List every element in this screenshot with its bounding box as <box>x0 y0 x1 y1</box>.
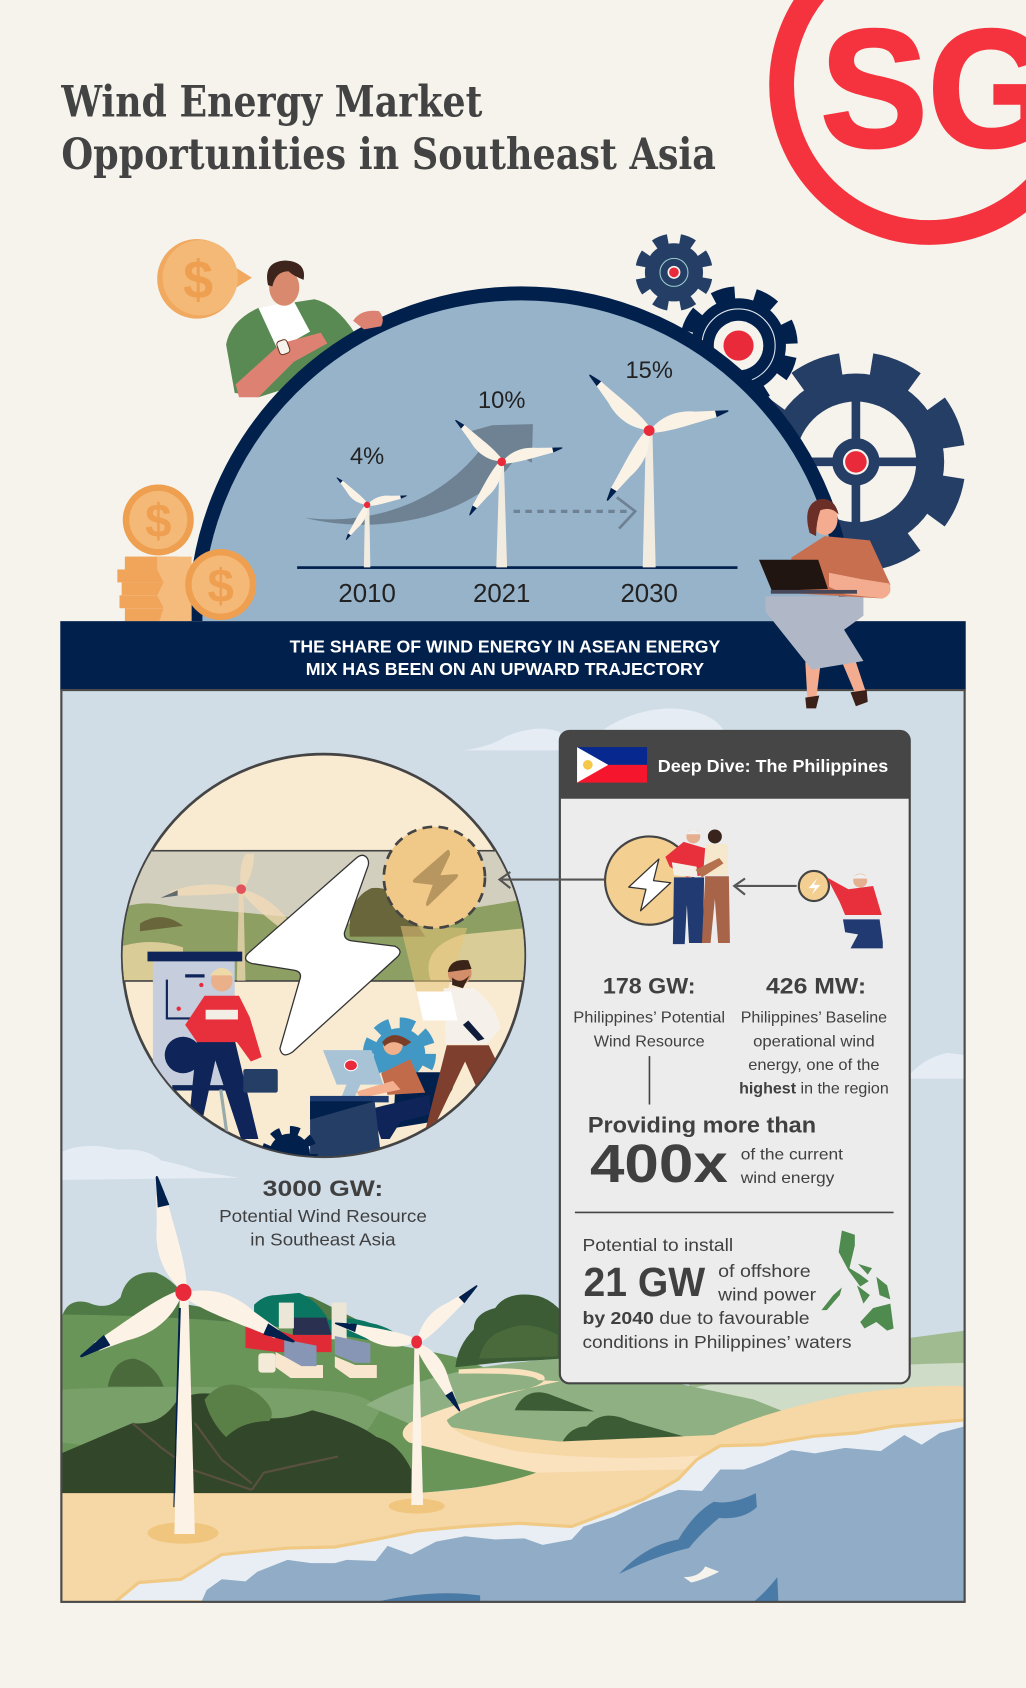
sea <box>201 1426 965 1602</box>
turbine 2021 <box>450 417 563 567</box>
document and arms <box>672 862 698 877</box>
man: sweater <box>226 299 355 397</box>
percent labels: 10% <box>478 388 525 414</box>
inner bush highlight <box>479 1325 558 1359</box>
arrow: between figures <box>734 878 797 895</box>
bases <box>276 1352 323 1378</box>
stat: 21 GW: of offshore <box>718 1261 811 1281</box>
ghost turbine <box>160 854 290 981</box>
stat: 400x: 400x <box>590 1134 728 1194</box>
stat: 426 MW: 426 MW: <box>766 974 866 999</box>
stat: 426 MW: highest in the region <box>739 1081 889 1098</box>
arrow: dashed to 2030 <box>514 497 635 529</box>
panel header <box>560 731 910 799</box>
gear behind woman <box>369 1024 430 1084</box>
man: shirt <box>258 301 310 350</box>
year labels: 2021 <box>473 580 530 608</box>
grey blocks <box>284 1339 317 1366</box>
connector line <box>649 1056 650 1105</box>
coin upper: $ <box>145 495 171 548</box>
stat: 426 MW: energy, one of the <box>748 1057 880 1074</box>
turbine 2030 <box>582 371 730 567</box>
stat: 400x <box>588 1113 844 1194</box>
sea streaks <box>619 1493 757 1574</box>
stat: 21 GW: 21 GW <box>584 1259 706 1305</box>
tank <box>258 1353 276 1373</box>
turbine: large foreground <box>77 1174 301 1534</box>
title: Wind Energy Market <box>61 77 482 127</box>
dark forest <box>61 1393 411 1494</box>
far fields <box>689 1330 964 1388</box>
left small bush <box>108 1359 164 1387</box>
title <box>61 77 716 180</box>
stat: 400x: Providing more than <box>588 1113 816 1138</box>
stat: 178 GW <box>573 974 725 1050</box>
panel: lower scene <box>61 690 965 1602</box>
mid green field <box>366 1358 781 1442</box>
coin lower: $ <box>208 560 234 613</box>
gear bottom <box>262 1126 318 1156</box>
year labels: 2030 <box>620 580 678 608</box>
man: head <box>267 261 304 306</box>
title: Opportunities in Southeast Asia <box>61 130 716 180</box>
laptop <box>759 560 857 594</box>
baseline <box>297 566 737 569</box>
stat: 426 MW: operational wind <box>753 1033 875 1050</box>
text: 3000 GW: 3000 GW: <box>263 1176 383 1201</box>
landscape <box>61 1272 965 1602</box>
window landscape <box>118 850 528 1178</box>
stat: 426 MW: Philippines’ Baseline <box>741 1010 887 1027</box>
percent labels: 15% <box>625 358 673 384</box>
icon: kneeling engineer with small circle <box>799 871 883 948</box>
coin stack <box>117 557 192 621</box>
icon: medium gear <box>677 284 800 407</box>
arch: wind share chart panel <box>188 286 848 622</box>
man with documents <box>417 960 504 1130</box>
engineer left <box>673 877 704 944</box>
year labels <box>338 580 678 608</box>
stat: 426 MW <box>739 974 889 1098</box>
light beam <box>400 926 467 993</box>
icon: dashed energy circle <box>384 827 485 928</box>
right dark bush <box>455 1295 571 1367</box>
turbine 2010 <box>333 476 408 567</box>
man: arm and hand <box>236 311 383 397</box>
icon: energy circle with two engineers <box>605 829 730 944</box>
divider <box>575 1212 894 1213</box>
lighter hill <box>62 1387 379 1445</box>
icon: dollar coins <box>117 484 256 621</box>
turbine shadows <box>147 1499 445 1544</box>
stat: 21 GW: wind power <box>717 1284 816 1304</box>
woman: trousers <box>765 596 863 670</box>
sand <box>61 1386 965 1602</box>
main green hill <box>62 1314 536 1493</box>
panel: deep dive Philippines <box>560 731 910 1383</box>
turbine: small foreground <box>332 1278 481 1505</box>
engineer board <box>147 952 242 1143</box>
pale road <box>403 1368 700 1473</box>
woman: arm <box>829 573 891 599</box>
icon: small gear <box>635 234 713 311</box>
logo: SG <box>782 0 1026 233</box>
band: share of wind energy: THE SHARE OF WIND ENERGY IN ASEAN ENERGY <box>290 636 721 656</box>
bushes left hill <box>62 1272 357 1322</box>
icon: Philippines map <box>821 1230 894 1331</box>
illustration: man with dollar bubble <box>157 239 355 397</box>
arrow: Philippines to Southeast Asia circle <box>500 872 605 888</box>
stat: 400x: wind energy <box>740 1170 835 1187</box>
icon: dollar speech bubble: $ <box>183 250 213 310</box>
year labels: 2010 <box>338 580 396 608</box>
woman: top <box>791 536 890 599</box>
arrow: growth swoosh <box>305 424 533 525</box>
engineer right <box>702 876 730 943</box>
factory <box>245 1303 377 1378</box>
text: 3000 GW <box>219 1176 427 1250</box>
foam <box>115 1420 965 1602</box>
stat: 178 GW: 178 GW: <box>603 974 695 999</box>
text: 3000 GW: Potential Wind Resource <box>219 1206 427 1226</box>
small bushes <box>515 1392 594 1411</box>
forest tree highlight <box>205 1385 272 1437</box>
stat: 178 GW: Philippines’ Potential <box>573 1010 725 1027</box>
band: share of wind energy <box>60 621 966 690</box>
header text: Deep Dive: The Philippines <box>658 756 888 776</box>
icon: Philippine flag <box>577 747 647 783</box>
text: 3000 GW: in Southeast Asia <box>250 1230 396 1250</box>
chimneys <box>279 1303 294 1328</box>
stat: 21 GW: Potential to install <box>582 1235 733 1255</box>
factory hill <box>254 1292 394 1340</box>
percent labels <box>350 358 673 470</box>
percent labels: 4% <box>350 444 384 470</box>
tree branches <box>132 1423 338 1490</box>
panel border <box>61 690 965 1602</box>
clouds <box>61 708 965 1180</box>
band: share of wind energy: MIX HAS BEEN ON AN UPWARD TRAJECTORY <box>306 659 705 679</box>
stat: 21 GW <box>582 1235 852 1352</box>
red building <box>245 1321 332 1352</box>
woman: head <box>807 499 839 536</box>
icon: large gear <box>744 350 968 574</box>
icon: dollar speech bubble <box>157 239 252 319</box>
engineer <box>185 968 278 1139</box>
panel: potential resource circle <box>118 754 528 1178</box>
roof <box>293 1318 332 1335</box>
woman: legs <box>805 652 868 708</box>
stat: 21 GW: conditions in Philippines’ waters <box>582 1332 852 1352</box>
stat: 21 GW: by 2040 due to favourable <box>582 1308 810 1328</box>
stat: 400x: of the current <box>741 1146 844 1163</box>
icon: large lightning bolt <box>246 855 400 1055</box>
illustration: woman with laptop <box>759 499 891 708</box>
stat: 178 GW: Wind Resource <box>594 1033 705 1050</box>
woman at computer <box>310 1024 454 1157</box>
